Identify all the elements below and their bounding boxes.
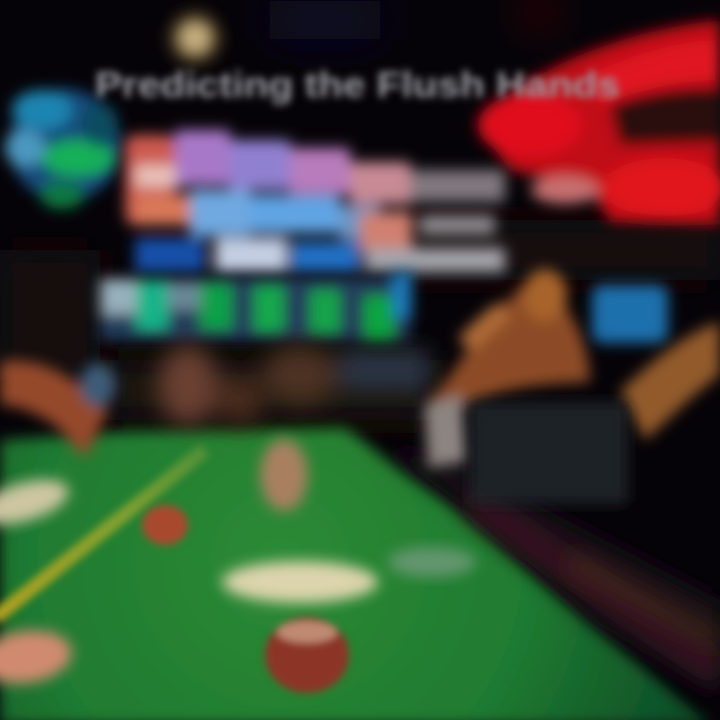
poker table felt — [0, 428, 710, 720]
chip: left bottom — [0, 625, 75, 689]
chip: left top — [0, 471, 73, 533]
chip: center ivory — [222, 561, 378, 603]
far right hand — [620, 322, 720, 440]
table rail — [370, 440, 720, 700]
right player hand — [424, 269, 590, 468]
table edge tan trim — [570, 560, 720, 640]
chip: red small — [142, 505, 188, 545]
ceiling light — [168, 11, 222, 65]
dark card box — [470, 402, 628, 504]
left player hand — [0, 361, 116, 458]
players in the middle — [158, 345, 430, 425]
chip: red large — [265, 617, 349, 693]
colorful headline block — [125, 130, 505, 272]
background: dim stage glow — [0, 0, 720, 420]
felt line: yellow — [0, 450, 205, 618]
title text: Predicting the Flush Hands — [95, 64, 620, 105]
green button row — [100, 272, 412, 342]
blue screen — [592, 285, 668, 343]
red curved shape — [476, 20, 720, 225]
chip: tan back — [260, 439, 308, 511]
chip: faded right — [388, 547, 476, 577]
globe icon — [5, 89, 121, 209]
table edge red trim — [470, 500, 720, 670]
